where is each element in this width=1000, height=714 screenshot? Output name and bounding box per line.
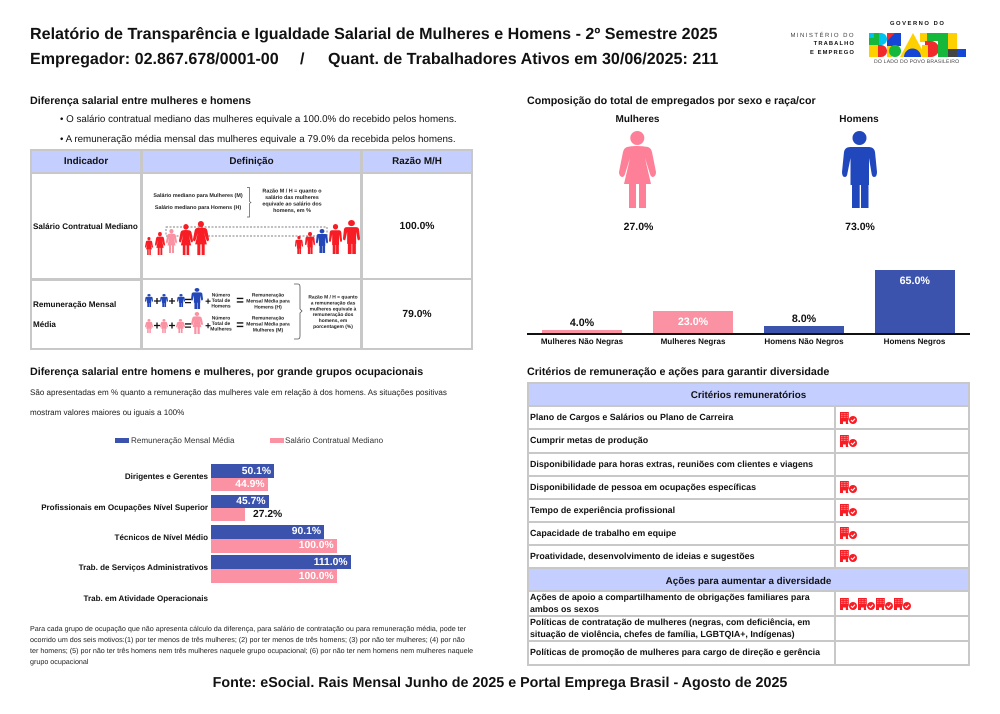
diagram: remuneração média: remuneração dos <box>313 312 354 318</box>
bar: mulheres negras: 23.0% <box>678 316 708 328</box>
row: equipe: Capacidade de trabalho em equipe <box>530 528 676 538</box>
diagram: remuneração média: Número <box>212 292 230 298</box>
panel: diferença salarial <box>30 94 473 350</box>
label: mulheres negras: Mulheres Negras <box>661 337 725 346</box>
bar: mulheres negras <box>653 311 733 334</box>
category labels: Dirigentes e Gerentes <box>125 472 208 481</box>
diagram: remuneração média: + <box>168 294 176 308</box>
footnote: Para cada grupo de ocupação que não apresenta cálculo da diferença, para salário de contratação ou para remuneração média, pode ter <box>30 625 466 633</box>
bar chart: 100.0% <box>299 540 334 551</box>
bar: homens negros: 65.0% <box>900 275 930 287</box>
table header: indicador: Indicador <box>64 156 108 167</box>
value: remuneração 79.0%: 79.0% <box>402 309 432 320</box>
value: salário 100.0% <box>361 172 473 280</box>
logo: governo do brasil: GOVERNO DO <box>890 21 945 27</box>
row: promoção <box>527 640 836 666</box>
diagram: remuneração média: homens, em <box>319 318 348 324</box>
diagram: remuneração média: = <box>236 292 244 308</box>
diagram: remuneração média: Mensal Média para <box>246 298 290 304</box>
category labels: Técnicos de Nível Médio <box>115 533 208 542</box>
source footer: Fonte: eSocial. Rais Mensal Junho de 2025 e Portal Emprega Brasil - Agosto de 2025 <box>213 674 787 690</box>
employer subtitle: Empregador: 02.867.678/0001-00 <box>30 50 279 68</box>
category labels: Trab. em Atividade Operacionais <box>84 594 208 602</box>
row label: remuneração mensal média: Remuneração Mensal Média <box>33 300 116 328</box>
employer subtitle: / <box>300 50 304 68</box>
text: bullet remuneração: • A remuneração média mensal das mulheres equivale a 79.0% da recebida pelos homens. <box>60 134 456 144</box>
table header: razão <box>361 149 473 174</box>
diagram: remuneração média: Homens <box>211 304 231 310</box>
diagram: salário mediano: homens, em % <box>273 208 311 214</box>
label: mulheres não negras: Mulheres Não Negras <box>541 337 623 346</box>
label: homens não negros: Homens Não Negros <box>764 337 844 346</box>
table header: razão: Razão M/H <box>392 156 442 167</box>
table header: critérios remuneratórios <box>527 382 970 407</box>
table header: ações: Ações para aumentar a diversidade <box>666 576 831 586</box>
diagram: remuneração média: Total de <box>212 298 230 304</box>
row label: salário contratual mediano <box>30 172 142 280</box>
panel: critérios <box>527 366 970 666</box>
row: apoio: Ações de apoio a compartilhamento de obrigações familiares para ambos os sexos <box>530 592 810 614</box>
row: proatividade <box>527 544 836 569</box>
row: tempo: Tempo de experiência profissional <box>530 505 675 515</box>
diagram: salário mediano: Salário mediano para Homens (H) <box>155 205 241 211</box>
row: metas <box>527 428 836 454</box>
diagram: salário mediano: equivale ao salário dos <box>262 202 322 208</box>
row: contratação: Políticas de contratação de mulheres (negras, com deficiência, em situação de violência, chefes de família, LGBTQIA+, Indígenas) <box>530 617 810 638</box>
row: ocupações específicas <box>527 475 836 500</box>
logo: governo do brasil <box>869 21 966 65</box>
footnote: ter homens; (5) por não ter três homens nem três mulheres naquele grupo ocupacional; (6) por não ter nem homens nem mulheres naquele <box>30 647 473 655</box>
legend <box>115 436 383 445</box>
logo: ministério: MINISTÉRIO DO <box>790 33 855 39</box>
row: horas extras: Disponibilidade para horas extras, reuniões com clientes e viagens <box>530 458 813 468</box>
category labels <box>41 472 208 603</box>
diagram: remuneração média: Razão M / H = quanto <box>308 294 358 300</box>
diagram: salário mediano: Razão M / H = quanto o <box>262 188 322 194</box>
logo: ministério <box>790 32 855 56</box>
diagram: salário mediano: salário das mulheres <box>265 195 319 201</box>
row: plano de cargos: Plano de Cargos e Salários ou Plano de Carreira <box>530 412 733 422</box>
employer subtitle: Quant. de Trabalhadores Ativos em 30/06/2025: 211 <box>328 50 718 68</box>
bar chart <box>211 464 351 583</box>
heading: diferença salarial: Diferença salarial entre mulheres e homens <box>30 94 251 106</box>
icon: homem <box>842 131 877 208</box>
legend: Salário Contratual Mediano <box>285 436 383 445</box>
footnote <box>30 625 473 666</box>
bar chart: 90.1% <box>292 526 321 537</box>
title: Relatório de Transparência e Igualdade Salarial de Mulheres e Homens - 2º Semestre 2025 <box>30 25 717 43</box>
icon: mulher <box>619 131 656 208</box>
value: remuneração 79.0% <box>361 278 473 350</box>
text: explicação linha 1: São apresentadas em % quanto a remuneração das mulheres vale em relação à dos homens. As situações positivas <box>30 388 447 397</box>
row: promoção: Políticas de promoção de mulheres para cargo de direção e gerência <box>530 647 820 657</box>
table header: definição <box>141 149 362 174</box>
diagram: remuneração média: Mulheres <box>210 326 232 332</box>
diagram: remuneração média: mulheres equivale à <box>310 306 357 312</box>
definition cell: remuneração <box>141 278 362 350</box>
bar: homens não negros <box>764 326 844 334</box>
diagram: remuneração média: porcentagem (%) <box>313 324 353 330</box>
logo: ministério: E EMPREGO <box>810 50 855 56</box>
column chart <box>527 270 970 346</box>
diagram: remuneração média: + <box>153 294 161 308</box>
value: mulheres 27.0%: 27.0% <box>624 220 653 232</box>
heading: composição: Composição do total de empregados por sexo e raça/cor <box>527 94 816 106</box>
panel: composição <box>527 94 970 346</box>
row label: salário contratual mediano: Salário Contratual Mediano <box>33 222 138 231</box>
heading: critérios: Critérios de remuneração e ações para garantir diversidade <box>527 366 829 378</box>
diagram: remuneração média: + <box>153 318 161 332</box>
bar chart: 111.0% <box>314 556 348 568</box>
row: metas: Cumprir metas de produção <box>530 435 648 445</box>
diagram: remuneração média: a remuneração das <box>311 300 356 306</box>
bar chart: 50.1% <box>242 466 271 476</box>
bar: homens negros <box>874 270 955 334</box>
diagram: remuneração média: = <box>236 317 244 332</box>
diagram: remuneração média: Total de <box>212 321 230 327</box>
diagram: remuneração média: Remuneração <box>252 292 284 298</box>
row: tempo <box>527 498 836 523</box>
footnote: ocorrido um dos seis motivos:(1) por ter menos de três mulheres; (2) por ter menos de três homens; (3) por não ter mulheres; (4) por não <box>30 636 465 644</box>
text: explicação linha 2: mostram valores maiores ou iguais a 100% <box>30 408 184 417</box>
diagram: remuneração média: Remuneração <box>252 316 284 322</box>
text: bullet salário contratual: • O salário contratual mediano das mulheres equivale a 100.0% do recebido pelos homens. <box>60 114 457 124</box>
label: mulheres: Mulheres <box>616 114 659 125</box>
diagram: remuneração média: Homens (H) <box>254 304 282 310</box>
footnote: grupo ocupacional <box>30 658 88 666</box>
bar chart: 100.0% <box>299 570 334 582</box>
diagram: salário mediano: Salário mediano para Mulheres (M) <box>153 193 243 199</box>
bar: mulheres não negras <box>542 330 622 334</box>
definition cell: salário <box>141 172 362 280</box>
diagram: remuneração média: = <box>184 318 192 332</box>
row: ocupações específicas: Disponibilidade de pessoa em ocupações específicas <box>530 482 756 492</box>
value: 8.0%: 8.0% <box>792 312 816 324</box>
bar chart: 45.7% <box>236 496 266 507</box>
value: homens 73.0%: 73.0% <box>845 220 875 232</box>
diagram: remuneração média: Mensal Média para <box>246 322 290 328</box>
label: homens negros: Homens Negros <box>884 337 945 346</box>
axis <box>527 333 970 335</box>
category labels: Trab. de Serviços Administrativos <box>79 563 208 572</box>
diagram: remuneração média: Número <box>212 316 230 322</box>
logo: governo do brasil: DO LADO DO POVO BRASILEIRO <box>874 59 959 65</box>
value: 4.0%: 4.0% <box>570 316 594 328</box>
row: horas extras <box>527 452 836 477</box>
diagram: remuneração média: + <box>205 321 211 332</box>
table header: definição: Definição <box>229 156 274 167</box>
bar chart: 44.9% <box>235 478 264 490</box>
row: plano de cargos <box>527 405 836 430</box>
bar chart: 27.2% <box>253 509 282 520</box>
diagram: remuneração média: + <box>205 296 211 308</box>
row label: remuneração mensal média <box>30 279 142 350</box>
category labels: Profissionais em Ocupações Nível Superior <box>41 503 208 512</box>
heading: grupos ocupacionais: Diferença salarial entre homens e mulheres, por grande grupos ocupacionais <box>30 366 423 378</box>
row: equipe <box>527 521 836 546</box>
logo: ministério: TRABALHO <box>814 41 855 47</box>
row: proatividade: Proatividade, desenvolvimento de ideias e sugestões <box>530 551 755 561</box>
diagram: remuneração média: Mulheres (M) <box>253 328 283 334</box>
panel: grupos ocupacionais <box>30 366 473 666</box>
legend: Remuneração Mensal Média <box>131 436 234 445</box>
employer subtitle <box>30 50 718 68</box>
diagram: remuneração média: = <box>184 294 192 308</box>
table header: ações <box>527 567 970 592</box>
diagram: remuneração média: + <box>168 318 176 332</box>
value: salário 100.0%: 100.0% <box>400 221 434 232</box>
table header: critérios remuneratórios: Critérios remuneratórios <box>691 390 806 401</box>
table header: indicador <box>30 149 142 174</box>
label: homens: Homens <box>839 114 879 125</box>
